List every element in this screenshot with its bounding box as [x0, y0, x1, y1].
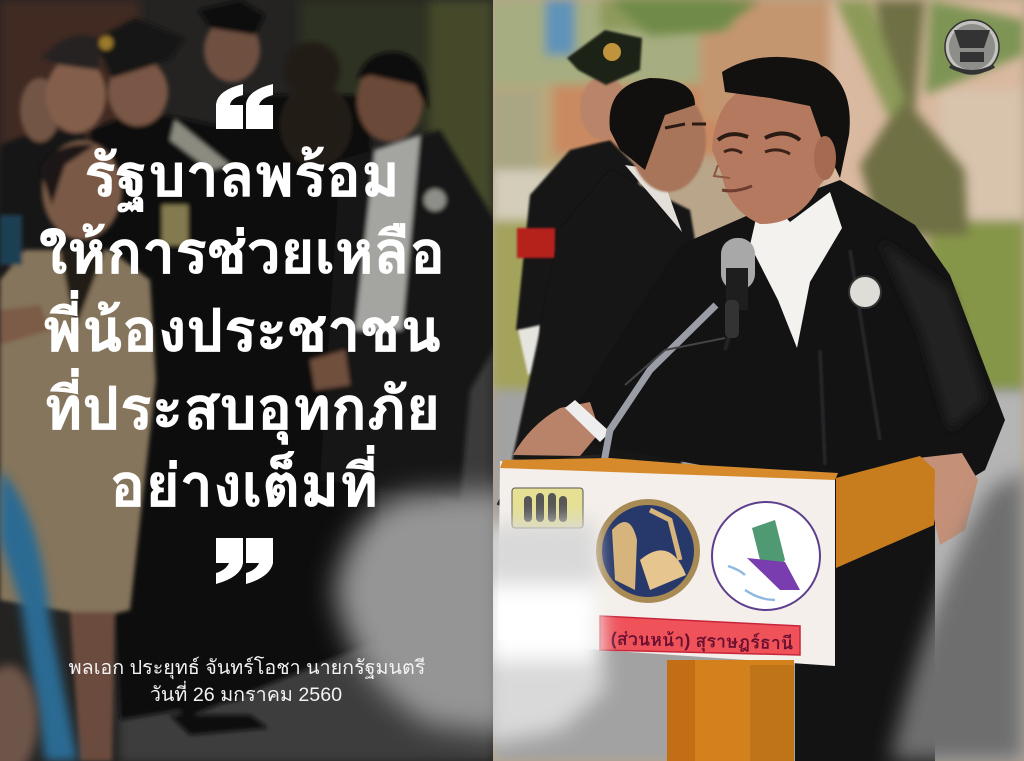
attribution [69, 656, 425, 706]
foreground blur at right corner [890, 470, 1024, 761]
headline quote: อย่างเต็มที่ [110, 445, 378, 519]
red name plate [600, 616, 800, 655]
attribution: พลเอก ประยุทธ์ จันทร์โอชา นายกรัฐมนตรี [69, 656, 425, 680]
headline quote: ให้การช่วยเหลือ [39, 220, 445, 286]
right hand [918, 453, 978, 545]
head [712, 85, 838, 224]
hand on podium [513, 402, 600, 456]
face features [714, 133, 800, 191]
foreground blue blur [0, 470, 78, 761]
headline quote: พี่น้องประชาชน [43, 290, 441, 364]
icon: opening quotation mark [216, 84, 273, 129]
attribution: วันที่ 26 มกราคม 2560 [150, 681, 342, 706]
woman in beige uniform [0, 140, 156, 761]
crowd figures [0, 0, 525, 735]
microphone [498, 238, 755, 505]
foreground skin blur [0, 665, 38, 761]
headline quote: ที่ประสบอุทกภัย [44, 368, 440, 445]
headline quote [39, 143, 445, 519]
podium [498, 456, 935, 761]
man in dark suit behind [512, 78, 710, 470]
foreground grey blur [335, 490, 510, 735]
shirt collar [750, 192, 842, 348]
panel: right photo background [485, 0, 1024, 761]
jacket pin [849, 276, 881, 308]
icon: closing quotation mark [216, 538, 273, 584]
panel: left darkened photo [0, 0, 525, 761]
hair [722, 57, 850, 178]
icon: government seal [945, 20, 999, 74]
guard in the background [516, 30, 642, 420]
yellow sign [512, 488, 583, 528]
emblem: gold and blue seal [599, 502, 697, 600]
emblem: Hanuman seal [712, 502, 820, 610]
foreground blur white [485, 520, 605, 745]
speaker body [513, 57, 1005, 761]
ear [814, 136, 836, 180]
red name plate: (ส่วนหน้า) สุราษฎร์ธานี [610, 629, 793, 654]
headline quote: รัฐบาลพร้อม [84, 143, 400, 212]
palm tree [610, 0, 1024, 235]
